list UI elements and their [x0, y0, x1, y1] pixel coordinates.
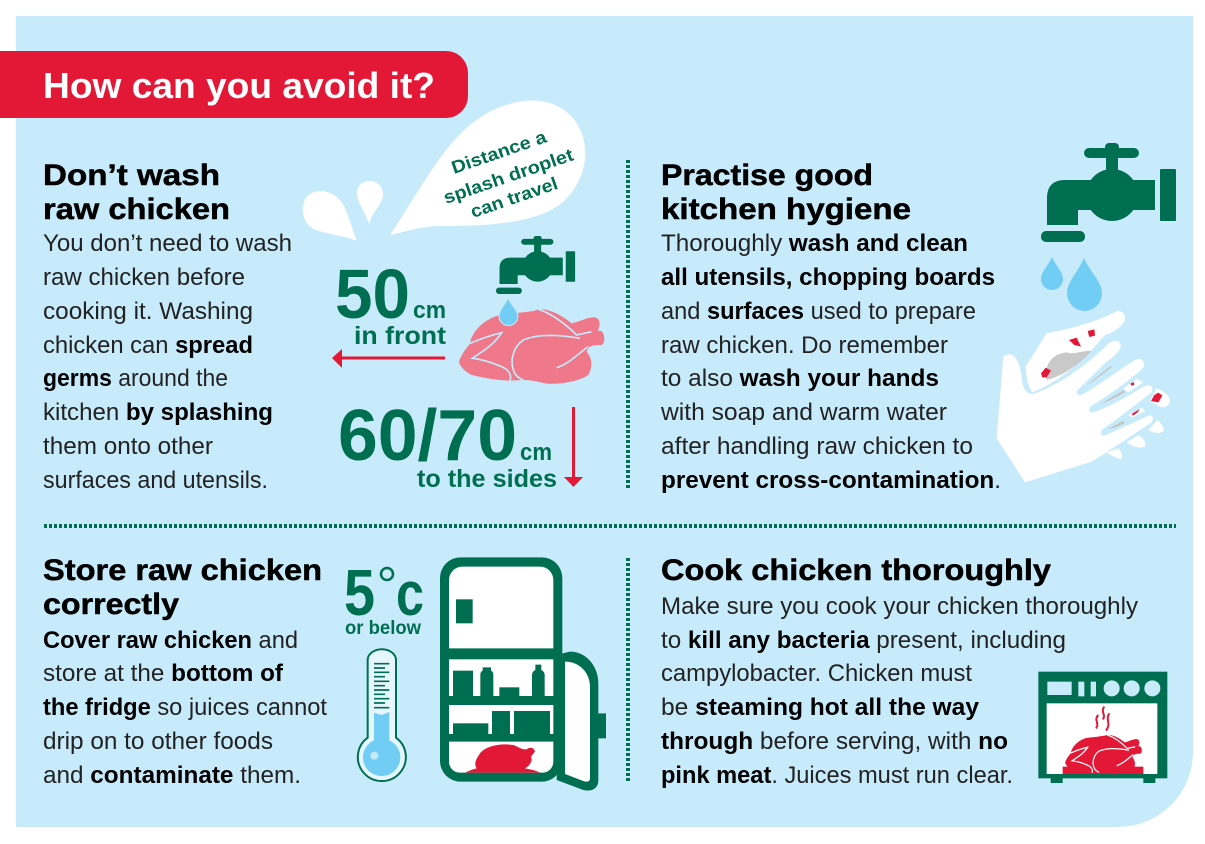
icon: oven [1038, 672, 1167, 783]
stat: 50cm in front: cm [413, 297, 446, 324]
icon: raw chicken [459, 309, 604, 384]
heading: store raw chicken correctly [43, 554, 322, 621]
heading: don't wash raw chicken: Don’t wash [43, 159, 220, 192]
body text: don't wash: them onto other [43, 433, 213, 460]
body text: don't wash: chicken can spread [43, 332, 253, 359]
callout: splash droplet bubble: splash droplet [441, 145, 576, 208]
body text: don't wash [43, 230, 292, 494]
icon: splash droplets [303, 181, 383, 241]
stat: 50cm in front: in front [354, 322, 447, 350]
panel: kitchen hygiene text [660, 159, 1001, 494]
heading: don't wash raw chicken [43, 159, 230, 226]
body text: cook [661, 593, 1138, 789]
panel: don't wash raw chicken text [43, 159, 292, 494]
callout: splash droplet bubble: Distance a [449, 126, 550, 178]
icon: fridge [440, 557, 606, 791]
body text: don't wash: germs around the [43, 365, 228, 392]
body text: hygiene: prevent cross-contamination. [661, 467, 1001, 494]
body text: hygiene: with soap and warm water [660, 399, 947, 426]
icon: washing hands [997, 311, 1170, 482]
body text: store: store at the bottom of [43, 660, 284, 687]
panel: cook chicken text [661, 554, 1138, 789]
stat: 50cm in front: 50 [335, 255, 410, 333]
heading: practise good kitchen hygiene: kitchen hygiene [661, 193, 911, 226]
heading: cook chicken thoroughly: Cook chicken thoroughly [661, 554, 1051, 587]
stat: 60/70cm to the sides: 60/70 [338, 396, 517, 476]
body text: don't wash: You don’t need to wash [43, 230, 292, 257]
heading: practise good kitchen hygiene [661, 159, 911, 226]
body text: cook: to kill any bacteria present, including [661, 627, 1066, 654]
heading: store raw chicken correctly: Store raw chicken [43, 554, 322, 587]
heading: store raw chicken correctly: correctly [43, 588, 179, 621]
stat: 50cm in front [335, 255, 447, 350]
body text: cook: pink meat. Juices must run clear. [661, 762, 1013, 789]
stat: 5 degrees c or below [344, 556, 424, 639]
callout: splash droplet bubble [390, 101, 585, 235]
icon: thermometer [358, 649, 406, 781]
stat: 60/70cm to the sides [338, 396, 557, 493]
callout: splash droplet bubble: can travel [468, 173, 560, 222]
body text: cook: through before serving, with no [661, 728, 1008, 755]
body text: don't wash: cooking it. Washing [43, 298, 253, 325]
title banner [0, 51, 468, 118]
body text: hygiene: Thoroughly wash and clean [661, 230, 968, 257]
body text: store: Cover raw chicken and [43, 627, 298, 654]
body text: hygiene [660, 230, 1001, 494]
icon: water drop on chicken [499, 298, 518, 326]
body text: store: and contaminate them. [43, 762, 301, 789]
dotted dividers [44, 160, 1176, 782]
body text: don't wash: raw chicken before [43, 264, 245, 291]
panel: store raw chicken text [43, 554, 327, 789]
icon: water drops [1041, 257, 1102, 311]
body text: store: the fridge so juices cannot [43, 694, 327, 721]
body text: cook: campylobacter. Chicken must [661, 660, 972, 687]
stat: 5 degrees c or below: 5 [344, 556, 375, 629]
stat: 60/70cm to the sides: to the sides [417, 465, 557, 493]
body text: cook: be steaming hot all the way [661, 694, 980, 721]
arrow: sides [564, 407, 583, 487]
icon: large tap [1041, 143, 1176, 242]
body text: hygiene: raw chicken. Do remember [661, 332, 948, 359]
stat: 5 degrees c or below: c [396, 560, 424, 629]
body text: don't wash: surfaces and utensils. [43, 467, 268, 494]
stat: 60/70cm to the sides: cm [520, 439, 552, 466]
body text: hygiene: after handling raw chicken to [661, 433, 973, 460]
title banner: How can you avoid it? [43, 65, 435, 106]
heading: practise good kitchen hygiene: Practise good [661, 159, 873, 192]
body text: hygiene: and surfaces used to prepare [661, 298, 976, 325]
body text: hygiene: all utensils, chopping boards [661, 264, 995, 291]
heading: don't wash raw chicken: raw chicken [43, 193, 230, 226]
stat: 5 degrees c or below: or below [345, 618, 421, 639]
icon: small tap [496, 236, 575, 294]
body text: store: drip on to other foods [43, 728, 273, 755]
body text: cook: Make sure you cook your chicken thoroughly [661, 593, 1138, 620]
body text: don't wash: kitchen by splashing [43, 399, 273, 426]
body text: store [43, 627, 327, 789]
icon: cooked chicken [1065, 735, 1142, 774]
arrow: front [332, 349, 445, 368]
body text: hygiene: to also wash your hands [661, 365, 939, 392]
